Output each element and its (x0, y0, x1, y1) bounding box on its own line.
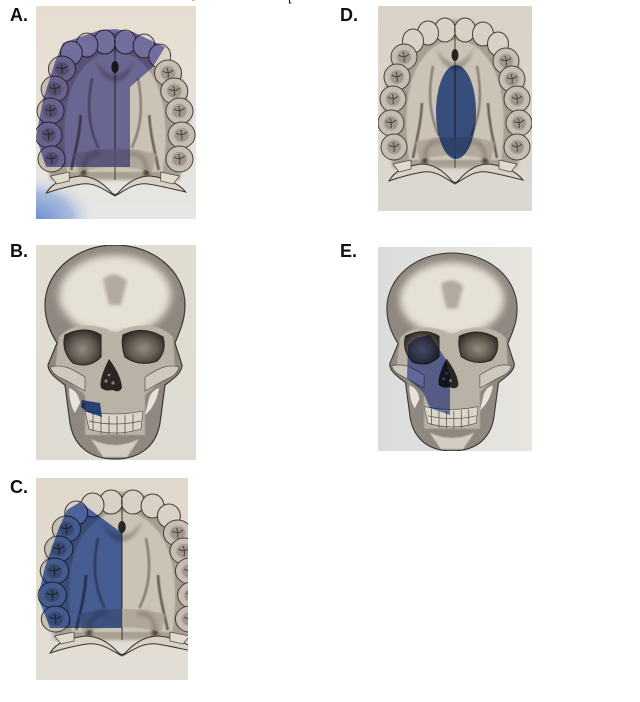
label: option D: D. (340, 5, 358, 25)
highlighted region: central palate ellipse (436, 65, 476, 159)
highlighted region: right maxillary teeth (81, 400, 102, 417)
panel: option B skull illustration (36, 245, 196, 460)
highlighted region: left palate and anterior (36, 29, 165, 167)
label: option A: A. (10, 5, 28, 25)
clipped text fragment at top edge (192, 0, 292, 4)
label: option C: C. (10, 477, 28, 497)
panel: option D palate illustration (378, 6, 532, 211)
highlighted region: right mid-face (407, 335, 450, 415)
highlighted region: left half of palate (39, 502, 122, 628)
label: option B: B. (10, 241, 28, 261)
label: option E: E. (340, 241, 357, 261)
panel: option C palate illustration (36, 478, 188, 680)
panel: option A palate illustration (35, 6, 196, 219)
panel: option E skull illustration (378, 247, 532, 451)
